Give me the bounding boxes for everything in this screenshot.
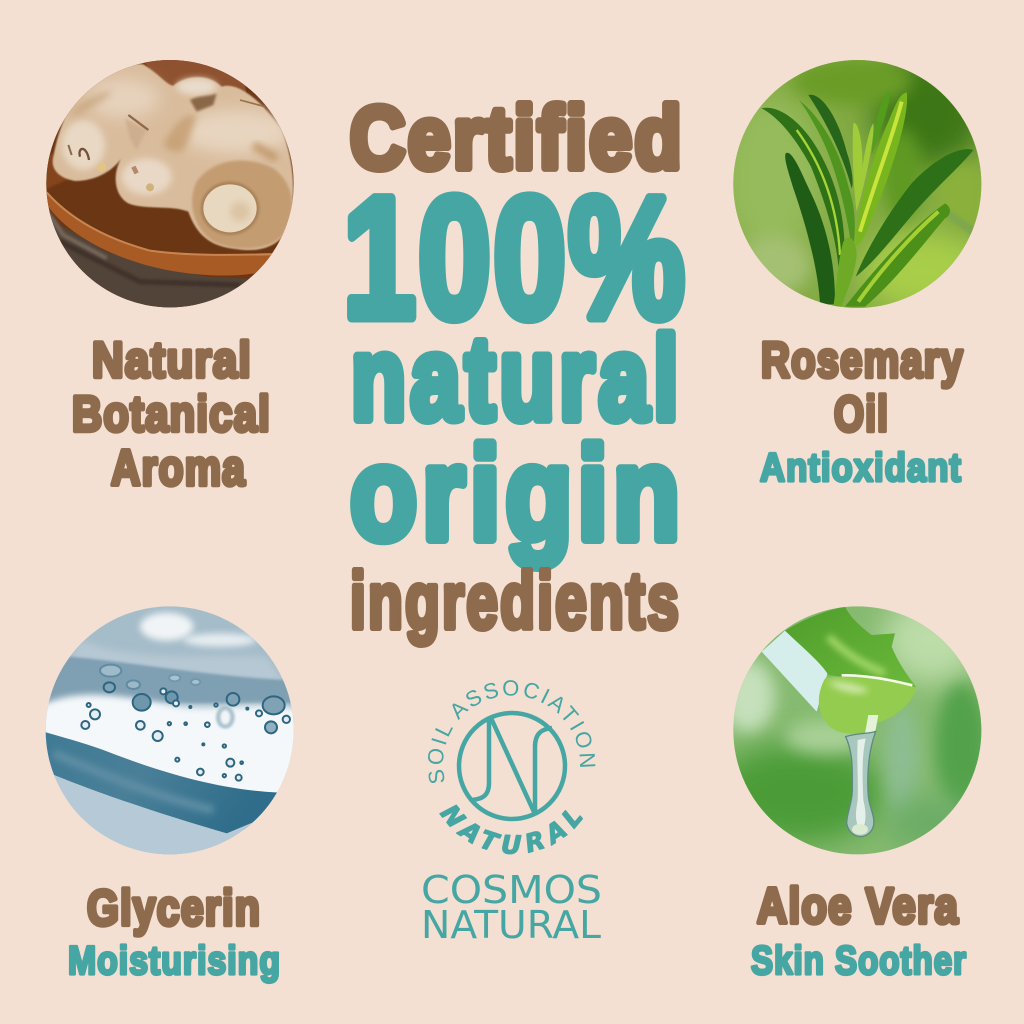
label: Natural Botanical Aroma: Botanical <box>72 386 271 442</box>
plate rim <box>45 191 280 276</box>
label: Aloe Vera Skin Soother: Skin Soother <box>751 939 967 983</box>
label: Rosemary Oil Antioxidant: Oil <box>834 386 889 442</box>
label: Glycerin Moisturising: Moisturising <box>68 939 281 983</box>
logo text: Cosmos: COSMOS <box>421 868 602 912</box>
label: Glycerin Moisturising: Glycerin <box>87 880 261 936</box>
label: Glycerin Moisturising <box>68 880 281 983</box>
logo ring with N monogram <box>459 713 565 819</box>
label: Aloe Vera Skin Soother: Aloe Vera <box>757 878 959 934</box>
leaves <box>785 153 835 304</box>
title: Certified 100% natural origin ingredients <box>343 88 687 645</box>
label: Aloe Vera Skin Soother <box>751 878 967 983</box>
ginger body <box>53 64 293 250</box>
label: Natural Botanical Aroma <box>72 332 271 496</box>
title line: natural: natural <box>351 313 683 445</box>
label: Rosemary Oil Antioxidant: Rosemary <box>761 332 964 388</box>
logo text: Natural: NATURAL <box>421 903 601 947</box>
label: Rosemary Oil Antioxidant <box>760 332 964 490</box>
photo: glycerin gel with bubbles <box>40 600 300 860</box>
label: Natural Botanical Aroma: Aroma <box>111 440 246 496</box>
table <box>49 210 250 308</box>
photo: ginger root on wooden plate <box>40 55 300 315</box>
logo: Soil Association Natural / Cosmos Natural <box>421 680 602 947</box>
photo: rosemary sprig <box>733 60 982 308</box>
logo arc text: Natural: NATURAL <box>439 804 583 854</box>
title line: 100%: 100% <box>343 162 687 354</box>
leaf <box>762 631 828 712</box>
title line: origin: origin <box>350 420 685 567</box>
logo arc text: Soil Association: SOIL ASSOCIATION <box>428 680 596 783</box>
photo: aloe vera leaf with drip <box>733 606 982 854</box>
label: Natural Botanical Aroma: Natural <box>92 332 252 388</box>
drip <box>846 731 876 837</box>
label: Rosemary Oil Antioxidant: Antioxidant <box>760 446 962 490</box>
title line: ingredients: ingredients <box>350 556 681 645</box>
title line: Certified: Certified <box>350 88 684 187</box>
